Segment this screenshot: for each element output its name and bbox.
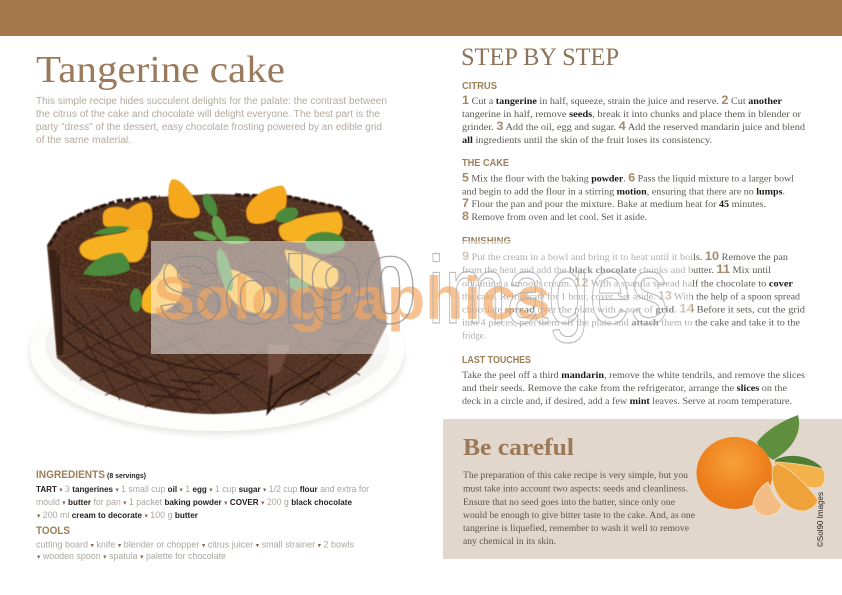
mandarin slices: [80, 180, 342, 313]
ingredients heading: [36, 469, 146, 481]
cake body: [47, 194, 387, 414]
the cake steps: and begin to add the flour in a stirring motion, ensuring that there are no lumps.: [462, 186, 785, 198]
chocolate rim: [49, 195, 372, 246]
panel: be careful: [443, 415, 842, 559]
top header bar: [0, 0, 842, 36]
step group: citrus: [462, 81, 805, 146]
panel background: [443, 419, 842, 559]
ingredients list: [36, 484, 369, 520]
finishing steps: 9 Put the cream in a bowl and bring it to heat until it boils. 10 Remove the pan: [462, 249, 788, 263]
finishing steps: the cake. Refrigerate for 1 hour, cover. Set aside. 13 With the help of a spoon spread: [462, 288, 800, 302]
ingredients heading: INGREDIENTS: [36, 469, 105, 481]
step by step heading: STEP BY STEP: [461, 44, 619, 71]
ingredients list: ▾ 200 ml cream to decorate ▾ 100 g butter: [37, 510, 199, 520]
step group: last touches: [462, 355, 805, 407]
finishing steps: from the heat and add the black chocolate chunks and butter. 11 Mix until: [462, 262, 771, 276]
photo credit: ©Sol90 Images: [816, 492, 825, 547]
intro paragraph: party "dress" of the dessert, easy chocolate frosting powered by an edible grid: [36, 122, 382, 133]
chocolate lattice: [60, 296, 375, 414]
cake top surface: [55, 200, 378, 318]
be careful text: must take into account two aspects: seeds and cleanliness.: [463, 484, 688, 494]
be careful heading: Be careful: [463, 434, 574, 461]
intro paragraph: the citrus of the cake and chocolate will delight everyone. The best part is the: [36, 109, 380, 120]
citrus steps: all ingredients until the skin of the fruit loses its consistency.: [462, 135, 712, 146]
photo: chocolate cake on a plate: [29, 180, 405, 435]
last touches text: and their seeds. Remove the cake from the refrigerator, arrange the slices on the: [462, 383, 787, 394]
tools list: cutting board ▾ knife ▾ blender or chopper ▾ citrus juicer ▾ small strainer ▾ 2 bowls: [36, 540, 354, 550]
be careful text: tangerine is liquefied, remember to wash it well to remove: [463, 523, 689, 534]
intro paragraph: [36, 96, 387, 146]
ingredients heading: (8 servings): [107, 473, 146, 480]
last touches text: [462, 370, 805, 407]
seam in the chocolate grid: [268, 345, 290, 378]
be careful text: [463, 470, 695, 547]
ingredients list: TART ▾ 3 tangerines ▾ 1 small cup oil ▾ 1 egg ▾ 1 cup sugar ▾ 1/2 cup flour and extra for: [36, 484, 369, 494]
finishing steps: fridge.: [462, 330, 486, 342]
the cake steps: 5 Mix the flour with the baking powder. 6 Pass the liquid mixture to a larger bowl: [462, 170, 794, 184]
finishing steps: obtaining a smooth cream. 12 With a spatula spread half the chocolate to cover: [462, 276, 794, 290]
tools list: ▾ wooden spoon ▾ spatula ▾ palette for chocolate: [37, 551, 226, 561]
finishing steps: chocolate spread over the plate with a sort of grid. 14 Before it sets, cut the grid: [462, 302, 805, 316]
tools heading: TOOLS: [36, 525, 70, 537]
finishing steps: [462, 249, 805, 342]
mint leaves: [83, 192, 345, 312]
tangerine segments: [773, 462, 825, 488]
tools block: [36, 525, 354, 561]
the cake steps: 7 Flour the pan and pour the mixture. Bake at medium heat for 45 minutes.: [462, 196, 766, 210]
citrus steps: grinder. 3 Add the oil, egg and sugar. 4 Add the reserved mandarin juice and blend: [462, 119, 805, 133]
tools list: [36, 540, 354, 561]
leaves: [757, 415, 799, 460]
citrus steps: [462, 93, 805, 146]
step group: finishing: [462, 236, 805, 342]
the cake steps: 8 Remove from oven and let cool. Set it aside.: [462, 209, 647, 223]
citrus steps: 1 Cut a tangerine in half, squeeze, strain the juice and reserve. 2 Cut another: [462, 93, 783, 107]
be careful text: any chemical in its skin.: [463, 536, 556, 547]
plate: [29, 271, 405, 435]
be careful text: would be enough to give bitter taste to the cake. And, as one: [463, 510, 695, 521]
watermark outline text images: images: [428, 237, 668, 344]
be careful text: The preparation of this cake recipe is very simple, but you: [463, 470, 688, 481]
title: Tangerine cake: [36, 49, 285, 91]
finishing heading: FINISHING: [462, 236, 511, 247]
whole tangerine: [696, 437, 772, 509]
ingredients block: [36, 469, 369, 520]
last touches text: deck in a circle and, if desired, add a few mint leaves. Serve at room temperature.: [462, 396, 792, 407]
ingredients list: mould ▾ butter for pan ▾ 1 packet baking powder ▾ COVER ▾ 200 g black chocolate: [36, 497, 352, 507]
watermark orange text: Solographics: [153, 265, 551, 332]
intro paragraph: of the same material.: [36, 135, 131, 146]
intro paragraph: This simple recipe hides succulent delights for the palate: the contrast between: [36, 96, 387, 107]
citrus steps: tangerine in half, remove seeds, break it into chunks and place them in blender or: [462, 109, 802, 120]
last touches text: Take the peel off a third mandarin, remove the white tendrils, and remove the slices: [462, 370, 805, 381]
the cake steps: [462, 170, 794, 223]
step group: the cake: [462, 158, 794, 223]
the cake heading: THE CAKE: [462, 158, 509, 169]
last touches heading: LAST TOUCHES: [462, 355, 531, 366]
citrus heading: CITRUS: [462, 81, 497, 92]
watermark outline text Sol90: Sol90: [158, 237, 417, 344]
icon: tangerine with leaves and segments: [696, 415, 825, 516]
watermark: [151, 237, 692, 354]
finishing steps: into 4 pieces, peel them off the plate and attach them to the cake and take it to the: [462, 318, 800, 328]
be careful text: Ensure that no seed goes into the batter, since only one: [463, 497, 675, 508]
